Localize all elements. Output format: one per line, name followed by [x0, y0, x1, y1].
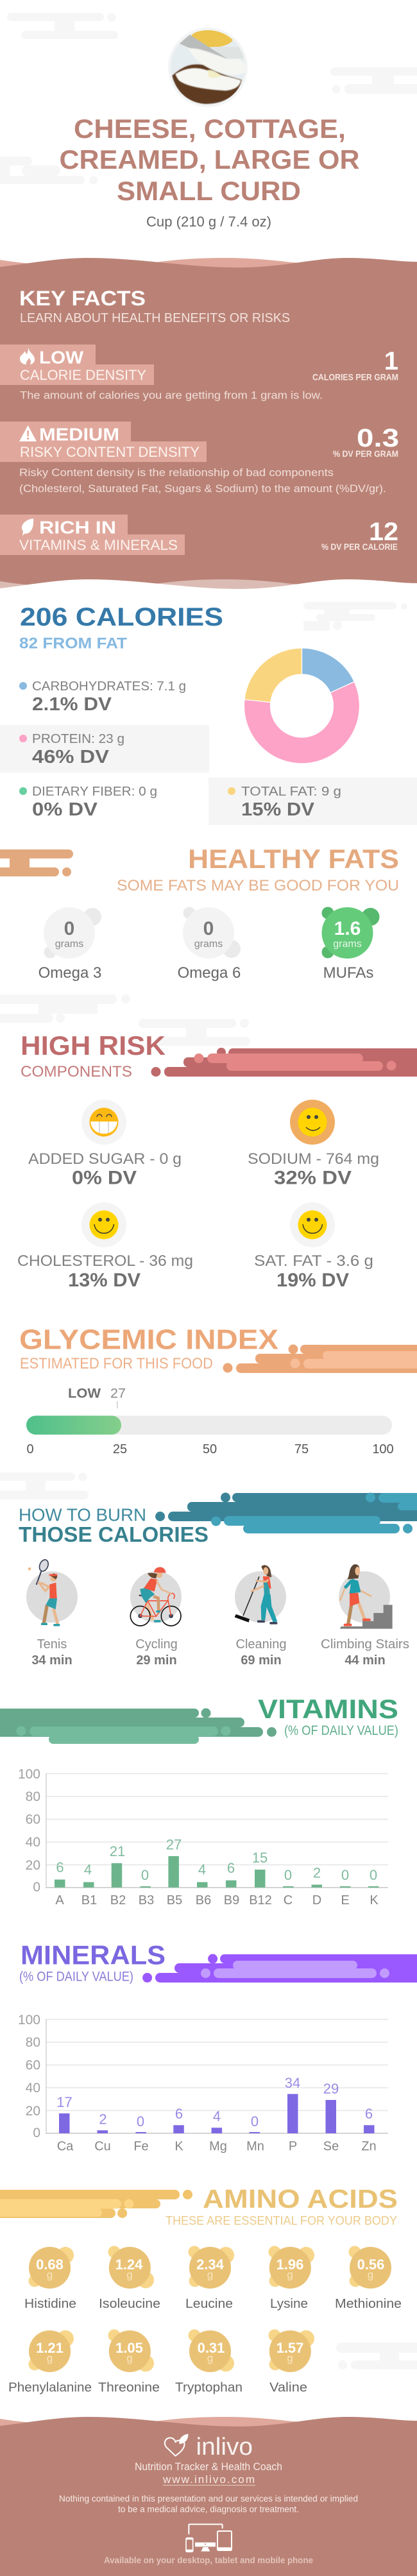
mufas: MUFAs [323, 964, 373, 982]
amino: tryptophan [175, 2329, 243, 2394]
omega 3: grams [55, 939, 83, 950]
fact: medium risky content density: (Cholesterol, Saturated Fat, Sugars & Sodium) to the amount (%DV/gr). [19, 483, 386, 495]
bar chart: vitamins: 0 [33, 1880, 40, 1895]
amino: phenylalanine: g [47, 2352, 53, 2364]
legend: carbohydrates [19, 679, 186, 715]
footer [0, 2417, 417, 2576]
subheading: SOME FATS MAY BE GOOD FOR YOU [117, 877, 399, 894]
legend: carbohydrates: CARBOHYDRATES: 7.1 g [32, 679, 186, 694]
fact: medium risky content density: MEDIUM [39, 425, 119, 444]
bar chart: vitamins: 27 [166, 1836, 182, 1853]
bar chart: vitamins: B6 [196, 1893, 211, 1907]
icon: food photo [168, 28, 248, 107]
bar chart: minerals: 2 [99, 2111, 107, 2128]
bar chart: vitamins: 20 [26, 1858, 40, 1873]
subheading: LEARN ABOUT HEALTH BENEFITS OR RISKS [20, 311, 290, 325]
amino: valine: 1.57 [277, 2340, 303, 2356]
amino: threonine [98, 2329, 160, 2394]
amino: lysine: 1.96 [277, 2256, 303, 2273]
panel: glycemic index [19, 1324, 417, 1456]
tagline: Nutrition Tracker & Health Coach [135, 2461, 282, 2473]
saturated fat: SAT. FAT - 3.6 g [254, 1252, 373, 1270]
disclaimer [59, 2493, 358, 2514]
bar chart: minerals: P [289, 2139, 297, 2153]
legend: total fat [208, 778, 417, 825]
bar chart: vitamins: B3 [139, 1893, 154, 1907]
heading: VITAMINS [258, 1694, 398, 1724]
fact: rich in vitamins and minerals: RICH IN [39, 517, 116, 538]
bar chart: vitamins: 15 [252, 1850, 268, 1866]
fact: medium risky content density: 0.3 [357, 424, 399, 452]
decorative streak [142, 1954, 417, 1983]
cholesterol: CHOLESTEROL - 36 mg [17, 1252, 193, 1270]
bar chart: minerals: 6 [175, 2106, 183, 2122]
activity: climbing stairs: Climbing Stairs [321, 1637, 409, 1651]
amino: isoleucine: Isoleucine [99, 2297, 160, 2311]
amino: leucine: 2.34 [196, 2256, 225, 2273]
legend: dietary fiber [19, 785, 157, 820]
bar chart: vitamins: 4 [198, 1862, 206, 1877]
disclaimer: to be a medical advice, diagnosis or treatment. [118, 2503, 299, 2514]
added sugar: 0% DV [72, 1168, 137, 1188]
value marker [68, 1386, 126, 1408]
amino: tryptophan: Tryptophan [175, 2380, 243, 2394]
bar chart: minerals: Cu [94, 2139, 111, 2153]
fact: low calorie density: CALORIES PER GRAM [312, 372, 398, 382]
gauge scale: 25 [113, 1442, 127, 1456]
heading: key facts: KEY FACTS [19, 287, 146, 310]
amino: methionine [335, 2246, 402, 2311]
bar chart: minerals: Se [323, 2139, 339, 2153]
amino: histidine: Histidine [24, 2297, 76, 2311]
bar chart: vitamins: 0 [141, 1867, 149, 1883]
panel: key facts [0, 258, 417, 597]
serving size: Cup (210 g / 7.4 oz) [146, 214, 271, 230]
gauge scale [26, 1442, 394, 1456]
gauge scale: 50 [203, 1442, 217, 1456]
added sugar [28, 1100, 182, 1188]
title: CREAMED, LARGE OR [59, 144, 359, 175]
amino: phenylalanine: Phenylalanine [8, 2380, 92, 2394]
panel: how to burn [19, 1492, 417, 1668]
omega 6: grams [194, 939, 223, 950]
heading: calories: 206 CALORIES [20, 603, 223, 631]
saturated fat [254, 1202, 373, 1291]
amino: isoleucine: 1.24 [115, 2256, 143, 2273]
bar chart: vitamins: 40 [26, 1835, 40, 1850]
panel: vitamins [0, 1694, 398, 1907]
amino: tryptophan: g [207, 2352, 213, 2364]
panel: amino acids [0, 2184, 402, 2394]
activity: climbing stairs [321, 1564, 409, 1668]
bar chart: vitamins: 100 [18, 1767, 40, 1782]
bar chart: minerals: Mn [246, 2139, 264, 2153]
fact: rich in vitamins and minerals [0, 515, 398, 555]
sodium: 32% DV [274, 1168, 352, 1188]
bar chart: vitamins: B5 [167, 1893, 182, 1907]
added sugar: ADDED SUGAR - 0 g [28, 1150, 182, 1168]
logo: inlivo: inlivo [196, 2434, 253, 2461]
availability note: Available on your desktop, tablet and mobile phone [104, 2555, 313, 2565]
subheading: ESTIMATED FOR THIS FOOD [20, 1355, 213, 1372]
bar chart: vitamins: 80 [26, 1789, 40, 1804]
fact: medium risky content density: % DV PER GRAM [333, 448, 398, 459]
amino: isoleucine [99, 2246, 160, 2311]
title [59, 114, 359, 206]
legend: protein [0, 725, 209, 772]
activity: cleaning [235, 1565, 286, 1668]
activity: cycling [130, 1567, 182, 1668]
decorative streak [155, 1492, 417, 1533]
bar chart: minerals [18, 2013, 388, 2153]
bar chart: vitamins: A [55, 1893, 64, 1907]
logo: inlivo [165, 2434, 253, 2461]
mufas: 1.6 [334, 918, 361, 939]
panel: high risk [17, 1030, 417, 1291]
activity: tennis: Tenis [37, 1637, 67, 1651]
bar chart: vitamins: E [341, 1893, 350, 1907]
donut chart [244, 648, 359, 763]
bar chart: vitamins: B2 [110, 1893, 126, 1907]
bar chart: vitamins: 4 [84, 1862, 92, 1877]
amino: threonine: Threonine [98, 2380, 160, 2394]
bar chart: vitamins: 2 [313, 1864, 321, 1881]
gauge scale: 75 [294, 1442, 309, 1456]
value marker: 27 [110, 1386, 126, 1401]
fact: rich in vitamins and minerals: VITAMINS & MINERALS [19, 537, 178, 553]
fact: low calorie density: LOW [39, 348, 84, 367]
disclaimer: Nothing contained in this presentation and our services is intended or implied [59, 2493, 358, 2503]
fact: low calorie density: The amount of calories you are getting from 1 gram is low. [20, 390, 323, 402]
icon: flame [20, 348, 35, 364]
amino: histidine: g [47, 2269, 53, 2281]
sodium [248, 1100, 379, 1188]
bar chart: minerals: 34 [285, 2075, 300, 2091]
heading: HIGH RISK [21, 1030, 166, 1061]
mufas [322, 907, 380, 982]
amino: lysine [268, 2246, 314, 2311]
fact: rich in vitamins and minerals: % DV PER CALORIE [321, 542, 398, 552]
heading: AMINO ACIDS [203, 2184, 398, 2213]
bar chart: minerals: 6 [365, 2106, 373, 2122]
title: CHEESE, COTTAGE, [74, 114, 346, 144]
amino: leucine: Leucine [185, 2297, 233, 2311]
amino: valine [268, 2329, 314, 2394]
omega 3: Omega 3 [38, 964, 101, 982]
amino: tryptophan: 0.31 [198, 2340, 225, 2356]
icon: warning [19, 425, 37, 441]
bar chart: vitamins: K [370, 1893, 379, 1907]
amino: leucine: g [207, 2269, 213, 2281]
sodium: SODIUM - 764 mg [248, 1150, 379, 1168]
bar chart: minerals: 40 [26, 2081, 40, 2095]
activity: cycling: Cycling [135, 1637, 178, 1651]
fact: rich in vitamins and minerals: 12 [369, 518, 398, 546]
bar chart: vitamins: B1 [81, 1893, 97, 1907]
bar chart: minerals: 4 [213, 2108, 221, 2124]
bar chart: vitamins [18, 1767, 388, 1907]
mufas: grams [333, 939, 362, 950]
subheading: (% OF DAILY VALUE) [19, 1970, 133, 1984]
title: SMALL CURD [117, 176, 301, 206]
activity: cleaning: Cleaning [236, 1637, 286, 1651]
icon: devices [186, 2524, 232, 2552]
subheading: (% OF DAILY VALUE) [284, 1723, 398, 1738]
value marker: LOW [68, 1386, 101, 1401]
panel: minerals [18, 1940, 417, 2153]
bar chart: minerals: 17 [56, 2094, 72, 2110]
bar chart: vitamins: B9 [224, 1893, 239, 1907]
bar chart: minerals: 60 [26, 2058, 40, 2072]
legend: total fat: TOTAL FAT: 9 g [241, 785, 341, 799]
cholesterol [17, 1202, 193, 1291]
bar chart: minerals: 29 [323, 2081, 339, 2097]
omega 3 [38, 907, 101, 982]
activity: cleaning: 69 min [241, 1653, 282, 1668]
decorative streak [0, 1708, 277, 1744]
legend: protein: 46% DV [32, 747, 110, 767]
bar chart: minerals: Mg [209, 2139, 227, 2153]
bar chart: vitamins: B12 [249, 1893, 272, 1907]
bar chart: minerals: Fe [133, 2139, 149, 2153]
saturated fat: 19% DV [277, 1270, 349, 1291]
legend: protein: PROTEIN: 23 g [32, 732, 124, 746]
subheading: COMPONENTS [21, 1063, 132, 1080]
heading: HEALTHY FATS [188, 844, 399, 874]
icon: leaf [22, 518, 33, 536]
amino: histidine [24, 2247, 76, 2311]
bar chart: vitamins: 0 [284, 1867, 292, 1883]
bar chart: minerals: 0 [137, 2113, 144, 2129]
decorative streak [0, 849, 73, 876]
bar chart: vitamins: D [312, 1893, 321, 1907]
legend: total fat: 15% DV [241, 799, 315, 820]
amino: valine: g [287, 2352, 293, 2364]
amino: methionine: 0.56 [357, 2256, 384, 2273]
bar chart: vitamins: 6 [227, 1860, 235, 1876]
decorative streak [151, 1048, 417, 1077]
fact: low calorie density [0, 345, 398, 402]
omega 6 [178, 907, 241, 982]
gauge scale: 100 [372, 1442, 394, 1456]
activity: tennis: 34 min [31, 1653, 72, 1668]
heading: MINERALS [21, 1940, 166, 1970]
omega 6: 0 [203, 918, 214, 939]
legend: carbohydrates: 2.1% DV [32, 694, 112, 715]
legend: dietary fiber: 0% DV [32, 799, 98, 820]
bar chart: vitamins: 6 [56, 1859, 64, 1875]
fact: low calorie density: CALORIE DENSITY [20, 367, 146, 383]
bar chart: vitamins: C [284, 1893, 293, 1907]
bar chart: vitamins: 0 [341, 1867, 349, 1883]
bar chart: minerals: 0 [251, 2113, 259, 2129]
amino: histidine: 0.68 [36, 2256, 64, 2273]
fact: medium risky content density: Risky Content density is the relationship of bad components [19, 467, 334, 479]
amino: phenylalanine: 1.21 [36, 2340, 64, 2356]
heading: HOW TO BURN [19, 1505, 146, 1524]
bar chart: minerals: K [174, 2139, 183, 2153]
amino: methionine: g [368, 2269, 373, 2281]
legend: dietary fiber: DIETARY FIBER: 0 g [32, 785, 157, 799]
amino: isoleucine: g [126, 2269, 133, 2281]
heading: GLYCEMIC INDEX [19, 1324, 278, 1355]
panel: how to burn: THOSE CALORIES [19, 1523, 208, 1546]
amino: threonine: 1.05 [115, 2340, 143, 2356]
bar chart: vitamins: 21 [110, 1843, 125, 1859]
amino: valine: Valine [269, 2380, 307, 2394]
bar chart: minerals: 80 [26, 2035, 40, 2050]
fact: medium risky content density [0, 422, 399, 495]
subheading: THESE ARE ESSENTIAL FOR YOUR BODY [166, 2213, 397, 2228]
bar chart: vitamins: 60 [26, 1812, 40, 1827]
amino: lysine: Lysine [270, 2297, 308, 2311]
omega 3: 0 [64, 918, 74, 939]
subheading: from fat: 82 FROM FAT [19, 635, 127, 652]
gauge scale: 0 [26, 1442, 34, 1456]
bar chart: minerals: 20 [26, 2104, 40, 2119]
bar chart: minerals: Ca [57, 2139, 74, 2153]
fact: low calorie density: 1 [384, 347, 398, 375]
fact: medium risky content density: RISKY CONTENT DENSITY [20, 444, 200, 460]
panel: healthy fats [0, 844, 399, 982]
amino: phenylalanine [8, 2330, 92, 2394]
amino: leucine [185, 2246, 234, 2311]
amino: lysine: g [287, 2269, 293, 2281]
amino: methionine: Methionine [335, 2297, 402, 2311]
activity: tennis [26, 1558, 78, 1668]
bar chart: vitamins: 0 [370, 1867, 377, 1883]
cholesterol: 13% DV [68, 1270, 140, 1291]
decorative streak [0, 2190, 192, 2218]
activity: cycling: 29 min [136, 1653, 177, 1668]
bar chart: minerals: 0 [33, 2126, 40, 2140]
bar chart: minerals: 100 [18, 2013, 40, 2027]
omega 6: Omega 6 [178, 964, 241, 982]
gauge bar [26, 1415, 392, 1435]
amino: threonine: g [126, 2352, 133, 2364]
activity: climbing stairs: 44 min [345, 1653, 386, 1668]
website: www.inlivo.com [162, 2473, 255, 2486]
bar chart: minerals: Zn [361, 2139, 377, 2153]
decorative streak [223, 1345, 417, 1373]
